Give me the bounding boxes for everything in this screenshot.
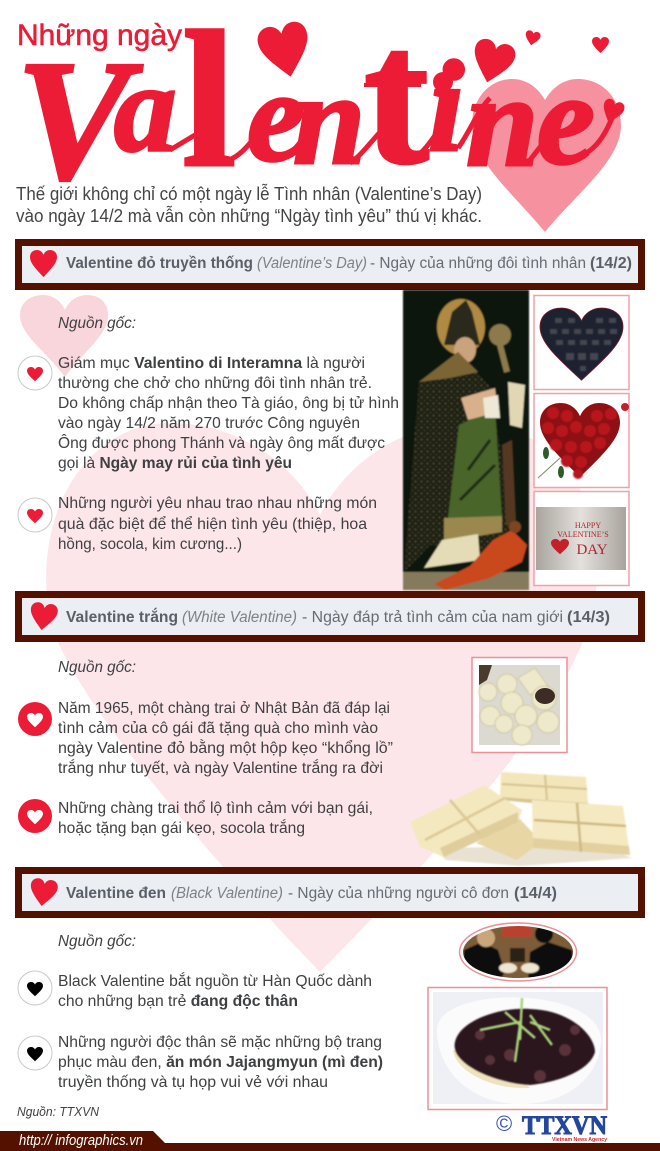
text block: 1965: trắng như tuyết, và ngày Valentine trắng ra đời: [58, 758, 383, 777]
text block: Jajangmyun: truyền thống và tụ họp vui vẻ với nhau: [58, 1074, 328, 1091]
heading text: - Ngày của những người cô đơn: [288, 885, 509, 902]
title: Valentine lettering: n: [466, 50, 538, 194]
text block: 1965: [58, 700, 393, 777]
image: happy Valentine card: DAY: [576, 542, 608, 558]
image: rose heart: [534, 394, 629, 488]
heading text: Valentine đen: [66, 885, 166, 902]
title: Valentine lettering: i: [428, 35, 464, 179]
source note: Nguồn: TTXVN: [17, 1104, 100, 1119]
title: Valentine lettering: e: [537, 48, 595, 192]
icon: bullet heart black: [18, 971, 52, 1005]
intro text: Thế giới không chỉ có một ngày lễ Tình nhân (Valentine’s Day): [16, 183, 482, 204]
icon: dot of i: [433, 72, 453, 92]
title: Valentine lettering: e: [247, 45, 305, 189]
icon: heart 3: [524, 30, 541, 47]
background heart: title pink: [472, 79, 621, 232]
heading text: (14/4): [514, 885, 557, 902]
text block: gifts: hồng, socola, kim cương...): [58, 536, 242, 553]
image: white chocolate bars: [410, 772, 632, 866]
icon: bullet heart white: [18, 799, 52, 833]
heading text: [66, 885, 557, 902]
icon: heart 1: [255, 19, 315, 82]
icon: heart 4: [592, 37, 609, 53]
logo: TTXVN: ©: [496, 1111, 512, 1136]
intro text: vào ngày 14/2 mà vẫn còn những “Ngày tình yêu” thú vị khác.: [16, 205, 482, 226]
image: couple eating in ellipse: [460, 923, 576, 981]
heading text: Valentine đỏ truyền thống: [66, 255, 253, 272]
text block: bishop: thường che chở cho những đôi tình nhân trẻ.: [58, 375, 372, 392]
background heart: small pink: [20, 295, 108, 377]
icon: header heart: [28, 877, 59, 908]
title: brush tails: [170, 98, 612, 163]
text block: bishop: Giám mục Valentino di Interamna là người: [58, 355, 365, 372]
text block: Korea: Black Valentine bắt nguồn từ Hàn Quốc dành: [58, 971, 372, 990]
heading text: - Ngày của những đôi tình nhân: [370, 255, 586, 272]
text block: gifts: quà đặc biệt để thể hiện tình yêu (thiệp, hoa: [58, 515, 367, 533]
heading text: - Ngày đáp trả tình cảm của nam giới: [302, 609, 563, 626]
heading text: (14/2): [590, 255, 632, 272]
title: [16, 0, 626, 216]
text block: gifts: hoặc tặng bạn gái kẹo, socola trắng: [58, 818, 305, 837]
text block: Korea: cho những bạn trẻ đang độc thân: [58, 993, 298, 1010]
icon: heart 2: [467, 37, 518, 88]
text block: bishop: gọi là Ngày may rủi của tình yêu: [58, 455, 292, 472]
label: origin: Nguồn gốc:: [58, 659, 136, 676]
icon: bullet heart black: [18, 1036, 52, 1070]
title: Valentine lettering: V: [16, 26, 143, 216]
intro text: [16, 183, 482, 226]
background heart: large pale: [46, 423, 598, 972]
panel: black Valentine header: [18, 870, 642, 914]
panel: white Valentine content: [18, 659, 393, 837]
image: happy Valentine card: HAPPY: [575, 521, 601, 530]
footer bar: [0, 1131, 660, 1151]
text block: 1965: tình cảm của cô gái đã tặng quà cho mình vào: [58, 720, 378, 737]
image: painting of the saint: [403, 290, 529, 590]
heading text: [66, 608, 610, 626]
logo: TTXVN: [496, 1111, 608, 1143]
text block: bishop: Ông được phong Thánh và ngày ông mất được: [58, 433, 385, 452]
title: Valentine lettering: n: [293, 48, 365, 192]
heading text: (14/3): [567, 609, 610, 626]
panel: black Valentine content: [18, 933, 383, 1091]
panel: white Valentine header: [18, 594, 642, 638]
image: happy Valentine card: [534, 492, 629, 586]
logo: TTXVN: Vietnam News Agency: [552, 1137, 608, 1143]
text block: gifts: [58, 799, 373, 837]
text block: Jajangmyun: Những người độc thân sẽ mặc những bộ trang: [58, 1034, 382, 1051]
image: heart chocolate box: [534, 296, 629, 390]
text block: 1965: Năm 1965, một chàng trai ở Nhật Bản đã đáp lại: [58, 700, 390, 717]
image: Jajangmyun bowl: [428, 988, 607, 1110]
heading text: (White Valentine): [182, 609, 297, 626]
text block: Jajangmyun: phục màu đen, ăn món Jajangmyun (mì đen): [58, 1054, 383, 1071]
text block: bishop: vào ngày 14/2 năm 270 trước Công nguyên: [58, 415, 360, 432]
panel: red Valentine header: [18, 242, 642, 286]
label: origin: Nguồn gốc:: [58, 315, 136, 332]
icon: header heart: [30, 250, 57, 277]
label: origin: Nguồn gốc:: [58, 933, 136, 950]
icon: bullet heart: [18, 356, 52, 390]
text block: 1965: ngày Valentine đỏ bằng một hộp kẹo “khổng lồ”: [58, 738, 393, 757]
icon: header heart: [28, 601, 59, 632]
title: first line: Những ngày: [17, 19, 182, 52]
title: t crossbar: [364, 83, 421, 87]
panel: red Valentine content: [18, 315, 399, 553]
text block: gifts: Những chàng trai thổ lộ tình cảm với bạn gái,: [58, 799, 373, 817]
heading text: (Black Valentine): [171, 885, 283, 902]
text block: bishop: [58, 355, 399, 472]
image: white candies: [472, 658, 567, 752]
text block: bishop: Do không chấp nhận theo Tà giáo, ông bị tử hình: [58, 395, 399, 412]
image: happy Valentine card: VALENTINE’S: [557, 530, 609, 539]
icon: bullet heart white: [18, 702, 52, 736]
icon: heart 5: [599, 97, 626, 126]
text block: gifts: [58, 495, 377, 553]
footer url: http:// infographics.vn: [19, 1133, 143, 1149]
logo: TTXVN: TTXVN: [522, 1111, 607, 1140]
heading text: [66, 255, 632, 272]
text block: Korea: [58, 971, 372, 1010]
text block: Jajangmyun: [58, 1034, 383, 1091]
icon: bullet heart: [18, 498, 52, 532]
heading text: Valentine trắng: [66, 608, 178, 626]
text block: gifts: Những người yêu nhau trao nhau những món: [58, 495, 377, 512]
heading text: (Valentine’s Day): [257, 255, 367, 272]
title: Valentine lettering: a: [114, 40, 176, 178]
